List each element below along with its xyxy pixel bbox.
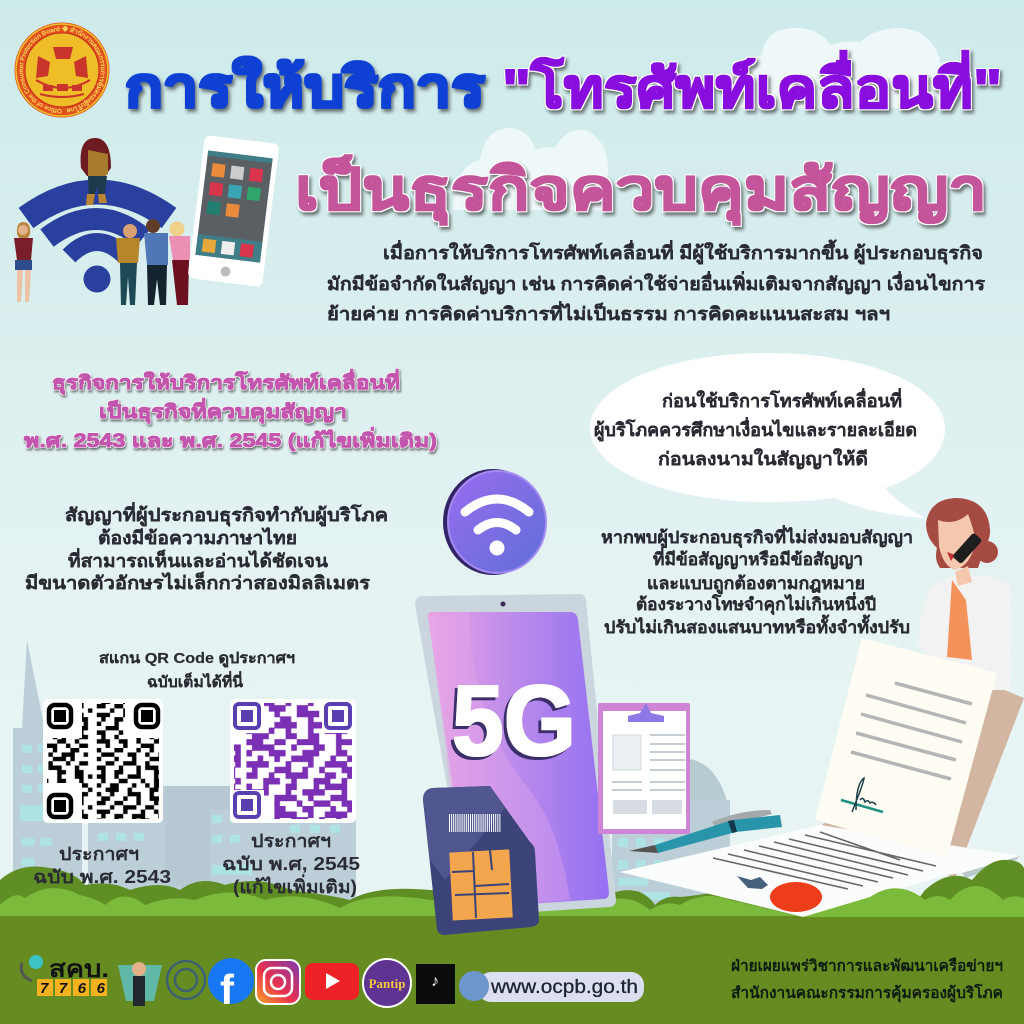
footer logos xyxy=(21,955,644,1013)
icon: wifi badge xyxy=(443,469,546,575)
title: mobile phone: "โทรศัพท์เคลื่อนที่" xyxy=(502,50,1002,119)
icon: instagram xyxy=(256,960,300,1004)
footer credit: สำนักงานคณะกรรมการคุ้มครองผู้บริโภค xyxy=(731,983,1003,1004)
QR code 2545 xyxy=(230,699,356,823)
caption QR 2543: ประกาศฯ xyxy=(59,844,139,864)
QR section heading xyxy=(99,650,295,691)
title line 1 xyxy=(125,50,1002,119)
QR section heading: สแกน QR Code ดูประกาศฯ xyxy=(99,650,295,668)
contract requirements text: มีขนาดตัวอักษรไม่เล็กกว่าสองมิลลิเมตร xyxy=(25,571,370,593)
face xyxy=(938,514,976,570)
logo: pantip: Pantip xyxy=(369,976,405,991)
caption QR 2545: (แก้ไขเพิ่มเติม) xyxy=(233,874,357,897)
speech bubble: ก่อนลงนามในสัญญาให้ดี xyxy=(658,448,868,470)
pen xyxy=(629,810,782,853)
clipboard document xyxy=(598,703,690,834)
intro paragraph: เมื่อการให้บริการโทรศัพท์เคลื่อนที่ มีผู้ใช้บริการมากขึ้น ผู้ประกอบธุรกิจ xyxy=(383,239,983,265)
contract requirements text: ต้องมีข้อความภาษาไทย xyxy=(98,527,297,548)
group of three people xyxy=(116,219,190,305)
5G tablet xyxy=(415,594,616,916)
icon: youtube xyxy=(305,963,359,1000)
penalty text xyxy=(601,525,913,637)
QR code 2543 xyxy=(43,699,163,823)
icon: tiktok: ♪ xyxy=(431,973,439,990)
icon: facebook xyxy=(208,958,254,1013)
signed contract page xyxy=(815,638,997,857)
caption QR 2545: ฉบับ พ.ศ, 2545 xyxy=(222,854,360,874)
footer credit xyxy=(731,957,1003,1004)
smartphone with apps xyxy=(188,135,279,287)
footer credit: ฝ่ายเผยแพร่วิชาการและพัฒนาเครือข่ายฯ xyxy=(731,957,1003,975)
left heading xyxy=(24,369,437,452)
intro paragraph: มักมีข้อจำกัดในสัญญา เช่น การคิดค่าใช้จ่ายอื่นเพิ่มเติมจากสัญญา เงื่อนไขการ xyxy=(327,271,985,295)
left heading: พ.ศ. 2543 และ พ.ศ. 2545 (แก้ไขเพิ่มเติม) xyxy=(24,427,437,452)
green hills xyxy=(0,866,803,917)
contract requirements text: ที่สามารถเห็นและอ่านได้ชัดเจน xyxy=(68,548,329,571)
website pill: www.ocpb.go.th xyxy=(490,977,638,998)
caption QR 2545 xyxy=(222,831,360,897)
caption QR 2543: ฉบับ พ.ศ. 2543 xyxy=(33,867,171,887)
clouds xyxy=(453,28,943,210)
footer band xyxy=(0,916,1024,1024)
right foreground hills xyxy=(803,860,1024,917)
logo: mascot xyxy=(118,962,162,1006)
caption QR 2543 xyxy=(33,844,171,887)
penalty text: ปรับไม่เกินสองแสนบาทหรือทั้งจำทั้งปรับ xyxy=(604,614,910,637)
hair xyxy=(926,498,990,568)
left heading: เป็นธุรกิจที่ควบคุมสัญญา xyxy=(99,398,347,424)
icon: facebook: f xyxy=(220,966,235,1013)
penalty text: ต้องระวางโทษจำคุกไม่เกินหนึ่งปี xyxy=(636,592,876,615)
penalty text: และแบบถูกต้องตามกฎหมาย xyxy=(647,574,865,595)
penalty text: ที่มีข้อสัญญาหรือมีข้อสัญญา xyxy=(653,547,863,570)
coat xyxy=(918,576,1011,690)
stamp xyxy=(770,882,822,912)
contract requirements text: สัญญาที่ผู้ประกอบธุรกิจทำกับผู้บริโภค xyxy=(65,502,388,527)
penalty text: หากพบผู้ประกอบธุรกิจที่ไม่ส่งมอบสัญญา xyxy=(601,525,913,549)
logo: OCPB 1166 hotline: 7766 xyxy=(40,980,106,997)
city skyline right xyxy=(612,758,732,910)
speech bubble: ผู้บริโภคควรศึกษาเงื่อนไขและรายละเอียด xyxy=(594,417,917,442)
person left xyxy=(14,222,33,302)
department seal: Office of the Consumer Protection Board ◆ สำนักงานคณะกรรมการคุ้มครองผู้บริโภค xyxy=(20,26,105,114)
speech bubble: ก่อนใช้บริการโทรศัพท์เคลื่อนที่ xyxy=(662,388,902,411)
SIM card xyxy=(423,786,539,935)
person sitting on wifi xyxy=(81,138,111,205)
envelope behind contract xyxy=(822,687,1024,878)
contract requirements text xyxy=(25,502,388,593)
icon: wifi symbol xyxy=(26,192,169,292)
phone xyxy=(952,532,982,564)
wifi illustration with people xyxy=(14,135,279,305)
caption QR 2545: ประกาศฯ xyxy=(251,831,331,851)
intro paragraph xyxy=(327,239,985,324)
title: service: การให้บริการ xyxy=(125,56,485,118)
city skyline left xyxy=(13,640,356,900)
logo: OCPB 1166 hotline: สคบ. xyxy=(49,956,109,983)
intro paragraph: ย้ายค่าย การคิดค่าบริการที่ไม่เป็นธรรม การคิดคะแนนสะสม ฯลฯ xyxy=(327,301,890,324)
QR section heading: ฉบับเต็มได้ที่นี่ xyxy=(147,671,244,691)
icon: tiktok xyxy=(416,964,455,1004)
logo: OCPB 1166 hotline xyxy=(21,955,109,997)
title line 2: เป็นธุรกิจควบคุมสัญญา xyxy=(295,154,987,226)
woman on the phone xyxy=(918,498,1011,690)
5G label: 5G xyxy=(452,665,576,777)
logo: pantip xyxy=(363,959,411,1007)
speech bubble xyxy=(590,353,945,518)
lower contract sheet xyxy=(620,825,1020,917)
logo: direct circle xyxy=(167,961,205,999)
website pill xyxy=(459,971,644,1002)
left heading: ธุรกิจการให้บริการโทรศัพท์เคลื่อนที่ xyxy=(52,369,400,395)
